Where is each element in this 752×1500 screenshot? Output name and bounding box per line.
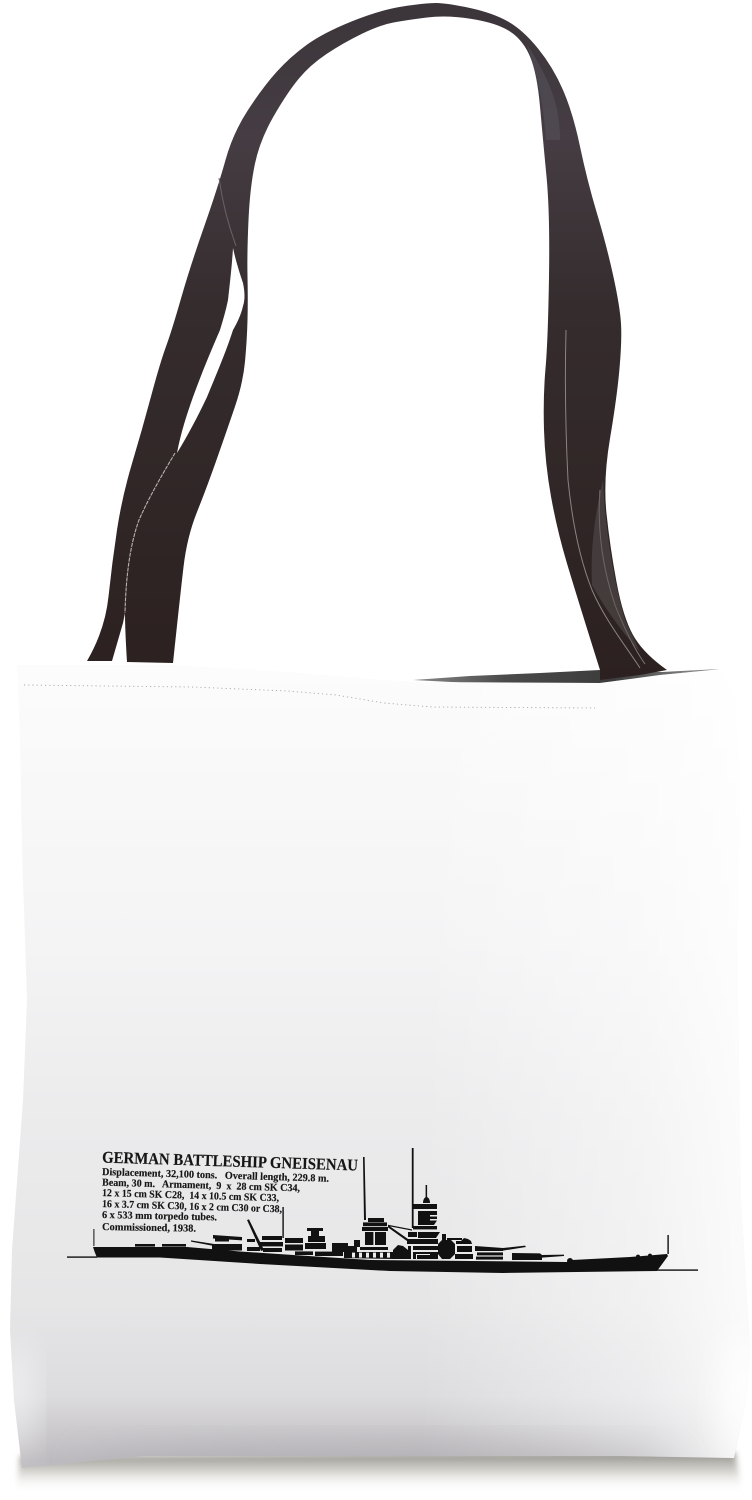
specification lines: 12 x 15 cm SK C28, 14 x 10.5 cm SK C33,: [102, 1188, 280, 1204]
right strap center seam: [565, 330, 640, 668]
specification lines: 16 x 3.7 cm SK C30, 16 x 2 cm C30 or C38,: [102, 1199, 283, 1215]
left strap seam: [125, 453, 175, 613]
ship specification text: [102, 1148, 358, 1235]
hull: [93, 1247, 668, 1273]
tote bag body: [0, 660, 752, 1487]
title: GERMAN BATTLESHIP GNEISENAU: [102, 1148, 358, 1175]
tote handles: [87, 3, 667, 680]
specification lines: [102, 1167, 329, 1235]
waterline: [67, 1256, 698, 1271]
forward turrets: [475, 1246, 652, 1264]
battleship silhouette: [67, 1148, 698, 1273]
top hem stitching: [24, 685, 595, 708]
gap between left straps: [177, 248, 244, 453]
crane: [247, 1219, 264, 1251]
specification lines: 6 x 533 mm torpedo tubes.: [102, 1210, 217, 1223]
right strap outer seam: [599, 490, 645, 664]
rear turrets: [135, 1235, 242, 1250]
bag fabric shading: [0, 660, 752, 1487]
right strap upper lighter fold: [527, 45, 560, 140]
bag interior back edge: [413, 669, 719, 684]
specification lines: Commissioned, 1938.: [102, 1222, 196, 1235]
left strap fold highlight: [219, 178, 236, 246]
masts and poles: [93, 1148, 669, 1254]
specification lines: Displacement, 32,100 tons. Overall length, 229.8 m.: [102, 1167, 329, 1185]
main tower: [344, 1218, 408, 1259]
ground shadow under bag: [16, 1452, 742, 1492]
forward superstructure: [388, 1197, 473, 1259]
right strap lower lighter fold: [592, 480, 640, 652]
tower lower windows: [352, 1253, 390, 1258]
after deckhouses: [247, 1228, 360, 1256]
specification lines: Beam, 30 m. Armament, 9 x 28 cm SK C34,: [102, 1178, 301, 1194]
